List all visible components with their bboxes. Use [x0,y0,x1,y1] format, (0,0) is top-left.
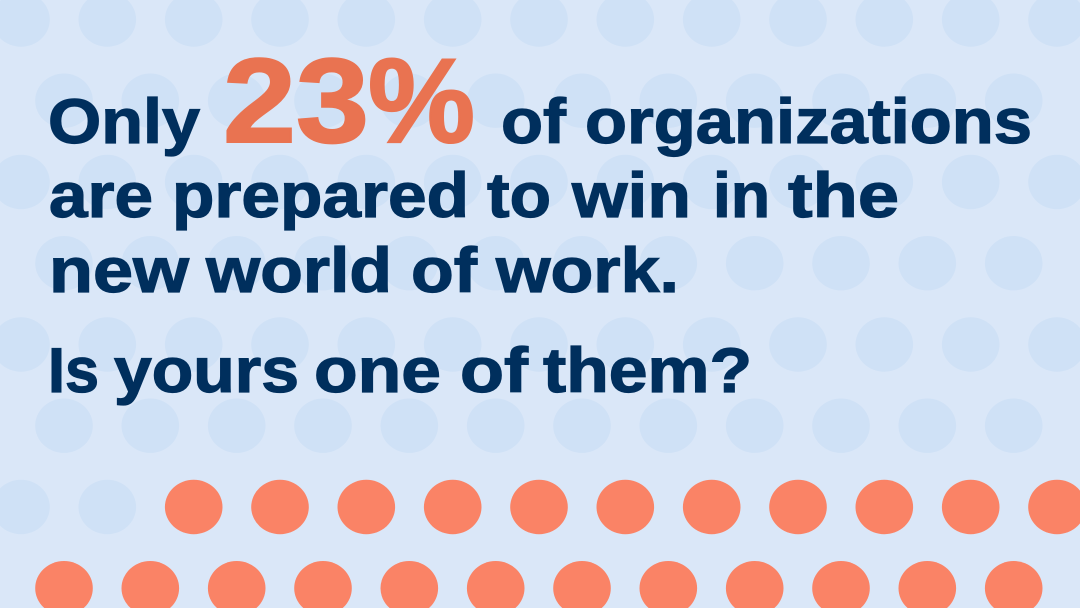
orange dot rows [35,480,1080,608]
line 3: work. [495,236,679,306]
closing question: of [460,336,529,406]
line 2: in [713,161,770,231]
line 2: the [788,161,899,231]
closing question: yours [114,336,299,406]
statistic: 23%: 23 [223,34,369,168]
line 2: win [571,161,691,231]
closing question: one [314,336,441,406]
line 3 [49,236,679,306]
headline text [48,34,1032,406]
closing question: Is [48,336,99,406]
line 3: of [411,236,478,306]
line 2: prepared [172,161,469,231]
line 2 [49,161,899,231]
closing question: them? [543,336,752,406]
line 3: new [49,236,190,306]
statistic: 23%: % [368,34,475,168]
statistic: 23% [223,34,475,168]
line 2: are [49,161,153,231]
word: Only: Only [48,87,200,157]
closing question [48,336,752,406]
line 2: to [487,161,551,231]
line 1 remainder: organizations [585,87,1032,157]
line 1 remainder: of [501,87,567,157]
line 3: world [205,236,392,306]
